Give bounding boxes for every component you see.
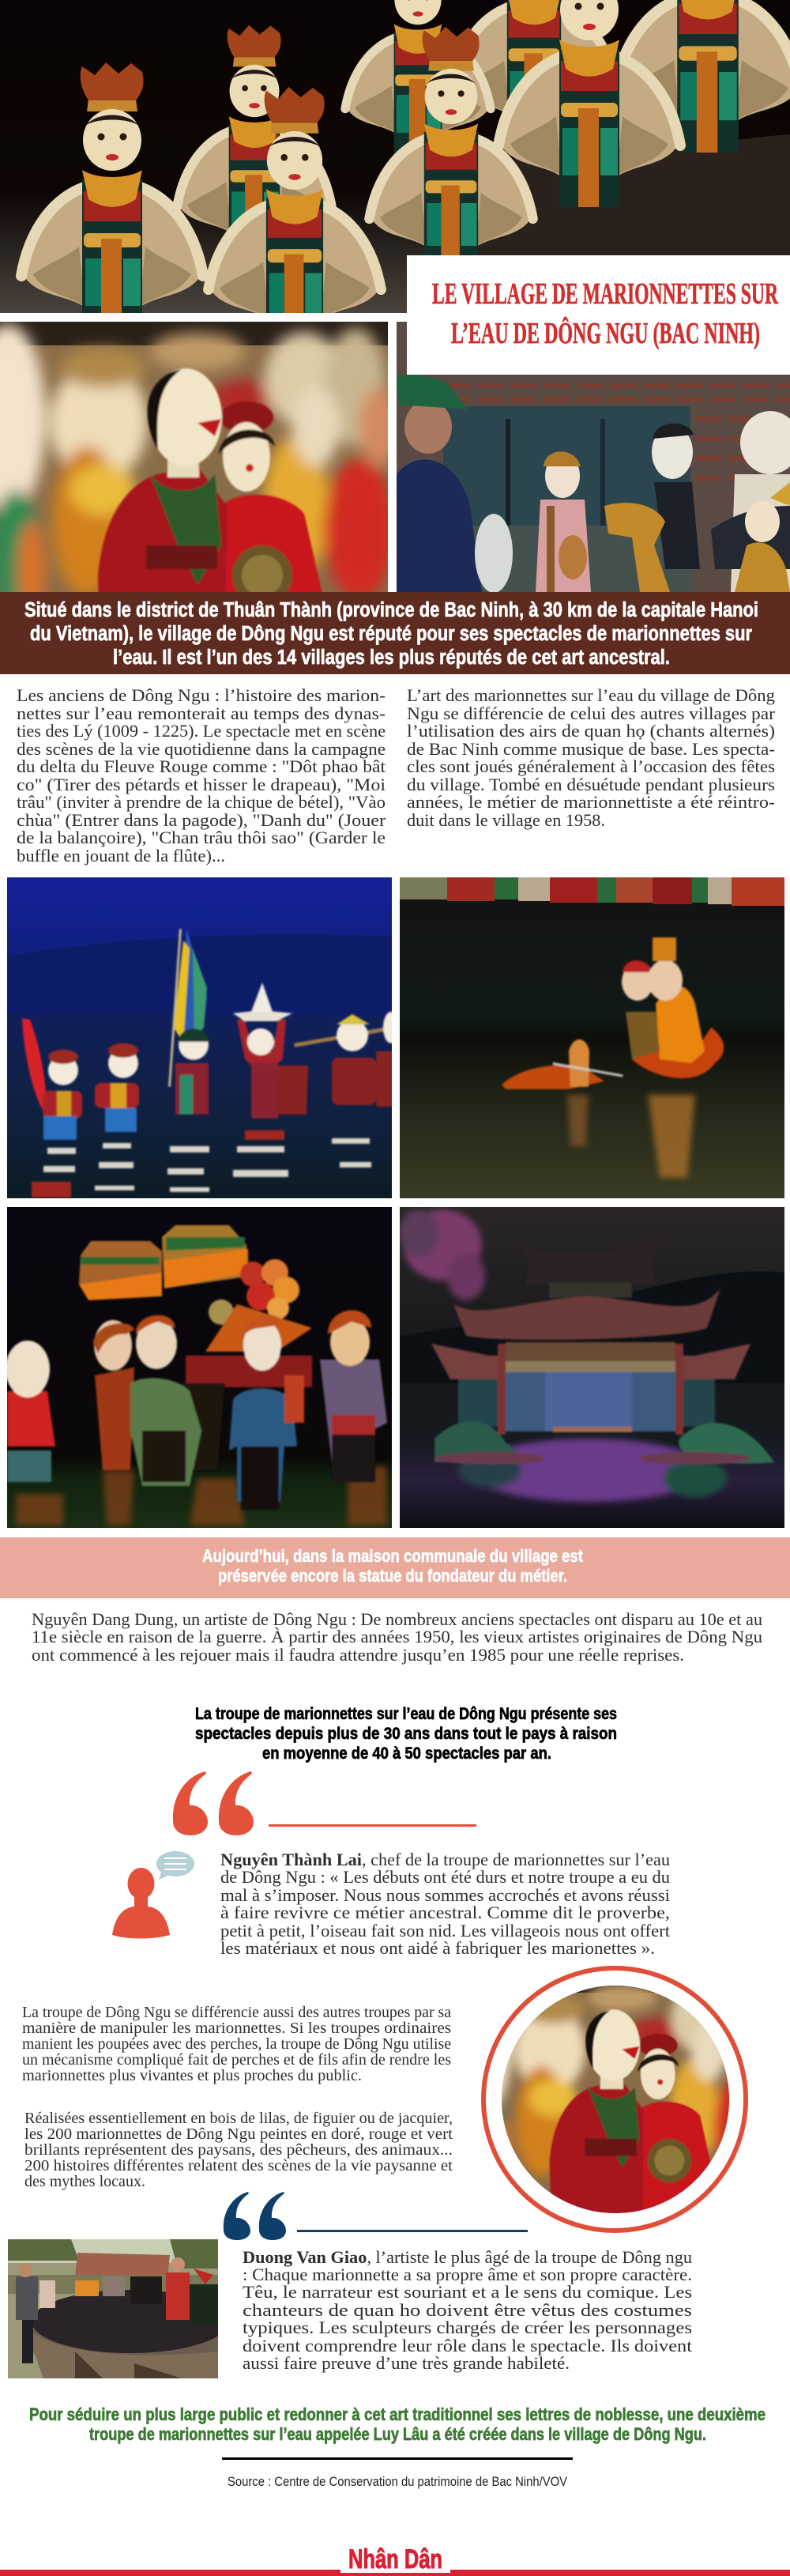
text: puppet materials [24,2110,453,2190]
quote: Duong Van Giao [243,2247,693,2373]
text column: history: du delta du Fleuve Rouge comme : "Dôt phao bât [17,756,386,776]
text column: history: buffle en jouant de la flûte)... [17,846,225,866]
photo: old artisan with puppets [397,322,790,593]
text: Nguyen Dang Dung paragraph: 11e siècle en raison de la guerre. À partir des années 1950, les vieux artistes originaires de Dông Ngu [32,1627,762,1646]
quote: Nguyen Thanh Lai: à faire revivre ce métier ancestral. Comme dit le proverbe, [220,1903,670,1922]
text: manipulation technique: manient les poupées avec des perches, la troupe de Dông Ngu utilise [22,2035,451,2053]
photo: close-up of puppets [0,322,388,592]
intro banner [0,592,790,674]
photo: procession on blue stage [7,877,399,1198]
text column: art of Dong Ngu: duit dans le village en 1958. [407,810,605,830]
text column: history [17,685,386,866]
quote: Nguyen Thanh Lai [220,1850,671,1958]
text column: art of Dong Ngu: années, le métier de marionnettiste a été réintro- [407,792,775,812]
quote: Duong Van Giao: doivent comprendre leur rôle dans le spectacle. Ils doivent [243,2336,693,2355]
text column: history: Les anciens de Dông Ngu : l’histoire des marion- [17,685,386,705]
pink callout band: préservée encore la statue du fondateur du métier. [218,1566,567,1586]
black highlighted statement: La troupe de marionnettes sur l’eau de Dông Ngu présente ses [195,1705,617,1723]
text column: history: chùa" (Entrer dans la pagode), "Danh du" (Jouer [17,810,386,830]
source line: Source : Centre de Conservation du patrimoine de Bac Ninh/VOV [228,2475,567,2489]
text: manipulation technique: marionnettes plus vivantes et plus proches du public. [22,2067,362,2084]
quote: Duong Van Giao: chanteurs de quan ho doivent être vêtus des costumes [243,2300,692,2320]
quote: Nguyen Thanh Lai: Nguyên Thành Lai, chef de la troupe de marionnettes sur l’eau [220,1850,670,1869]
text column: art of Dong Ngu [407,685,776,830]
quote: Nguyen Thanh Lai: petit à petit, l’oiseau fait son nid. Les villageois nous ont offert [220,1921,671,1940]
text column: history: de la balançoire), "Chan trâu thôi sao" (Garder le [17,828,386,847]
text column: art of Dong Ngu: de Bac Ninh comme musique de base. Les specta- [407,739,775,759]
green closing statement [29,2404,766,2444]
black highlighted statement [195,1705,617,1763]
text column: art of Dong Ngu: l’utilisation des airs de quan họ (chants alternés) [407,721,775,741]
icon: speaking person [112,1851,194,1938]
text: manipulation technique: La troupe de Dông Ngu se différencie aussi des autres troupes par sa [22,2004,451,2021]
intro banner: l’eau. Il est l’un des 14 villages les plus réputés de cet art ancestral. [113,647,670,669]
text: Nguyen Dang Dung paragraph [32,1609,762,1665]
quote: Nguyen Thanh Lai: les matériaux et nous ont aidé à fabriquer les marionettes ». [220,1938,655,1958]
source line [222,2457,573,2489]
title box [407,255,790,375]
text: Nguyen Dang Dung paragraph: ont commencé à les rejouer mais il faudra attendre jusqu’en 1985 pour une réelle reprises. [32,1645,684,1665]
quote: Duong Van Giao: aussi faire preuve d’une très grande habileté. [243,2353,570,2373]
photo: water pavilion at night [399,1207,784,1528]
text: puppet materials: les 200 marionnettes de Dông Ngu peintes en doré, rouge et vert [24,2125,453,2143]
pink callout band: Aujourd’hui, dans la maison communale du village est [202,1546,583,1566]
text column: art of Dong Ngu: L’art des marionnettes sur l’eau du village de Dông [407,685,775,705]
text: manipulation technique: manière de manipuler les marionnettes. Si les troupes ordinaires [22,2020,451,2037]
text: Nguyen Dang Dung paragraph: Nguyên Dang Dung, un artiste de Dông Ngu : De nombreux anciens spectacles ont disparu au 10e et au [32,1609,762,1629]
circular photo with red ring [481,1966,748,2233]
quote: Duong Van Giao: Duong Van Giao, l’artiste le plus âgé de la troupe de Dông ngu [243,2247,692,2267]
black highlighted statement: en moyenne de 40 à 50 spectacles par an. [262,1744,551,1763]
black highlighted statement: spectacles depuis plus de 30 ans dans tout le pays à raison [195,1725,617,1743]
photo: visitors around a puppet pool [8,2239,229,2378]
text column: art of Dong Ngu: du village. Tombé en désuétude pendant plusieurs [407,775,775,794]
quote: Duong Van Giao: : Chaque marionnette a sa propre âme et son propre caractère. [243,2265,692,2284]
quote: Duong Van Giao: typiques. Les sculpteurs chargés de créer les personnages [243,2318,692,2337]
icon: blue quotation mark with rule [224,2192,528,2240]
text: puppet materials: Réalisées essentiellement en bois de lilas, de figuier ou de jacquier, [24,2110,453,2127]
pink callout band [0,1537,790,1598]
quote: Duong Van Giao: Têu, le narrateur est souriant et a le sens du comique. Les [243,2282,692,2302]
text column: history: nettes sur l’eau remonterait au temps des dynas- [17,703,386,723]
text: puppet materials: brillants représentent des paysans, des pêcheurs, des animaux... [24,2141,453,2159]
quote: Nguyen Thanh Lai: de Dông Ngu : « Les débuts ont été durs et notre troupe a eu du [220,1867,670,1887]
text: puppet materials: des mythes locaux. [24,2173,145,2190]
logo: Nhan Dan footer [0,2544,790,2576]
text: manipulation technique: un mécanisme compliqué fait de perches et de fils afin de rendre les [22,2051,451,2069]
text column: history: des scènes de la vie quotidienne dans la campagne [17,739,386,759]
text column: art of Dong Ngu: cles sont joués généralement à l’occasion des fêtes [407,756,775,776]
photo: umbrellas and fruit procession [6,1207,392,1528]
quote: Nguyen Thanh Lai: mal à s’imposer. Nous nous sommes accrochés et avons réussi [220,1885,670,1905]
text column: art of Dong Ngu: Ngu se différencie de celui des autres villages par [407,703,776,723]
text: puppet materials: 200 histoires différentes relatent des scènes de la vie paysanne et [24,2157,453,2174]
text column: history: co" (Tirer des pétards et hisser le drapeau), "Moi [17,775,386,794]
logo: Nhan Dan footer: Nhân Dân [348,2544,442,2574]
photo: dragon and two puppets [400,877,784,1198]
icon: red quotation mark with rule [173,1771,476,1835]
text: manipulation technique [22,2004,451,2084]
text column: history: ties des Lý (1009 - 1225). Le spectacle met en scène [17,721,386,741]
text column: history: trâu" (inviter à prendre de la chique de bétel), "Vào [17,792,386,812]
hero photo: water puppets [0,0,790,313]
